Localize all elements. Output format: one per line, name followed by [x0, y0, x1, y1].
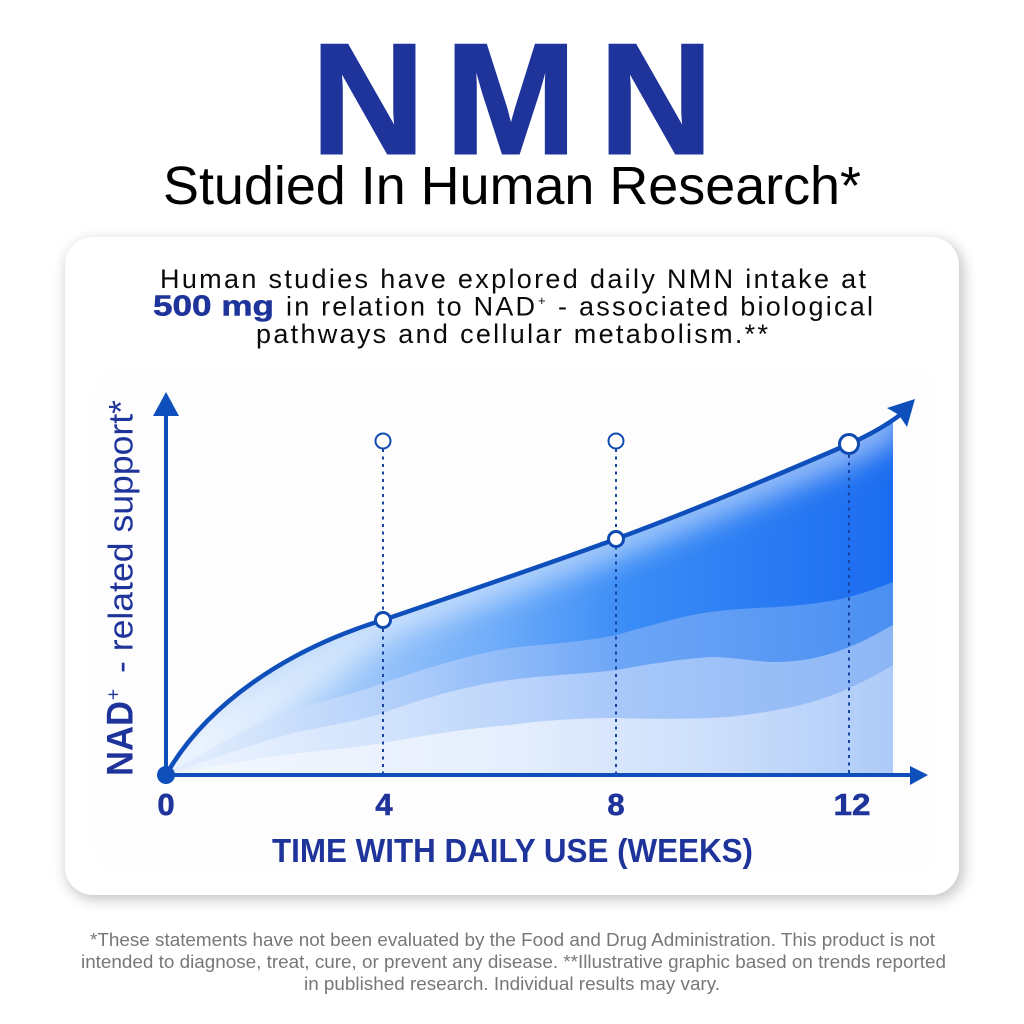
intro text block	[153, 264, 873, 349]
y axis label	[100, 400, 140, 776]
y axis arrow	[153, 392, 179, 775]
trend curve with arrow	[166, 399, 915, 775]
panel: study chart card	[65, 237, 963, 899]
footer disclaimer: in published research. Individual results may vary.	[304, 974, 720, 994]
chart: NAD+ related support over time	[100, 375, 930, 869]
dotted guide lines	[383, 449, 849, 774]
x axis tick labels: 8	[607, 787, 625, 822]
x axis tick labels: 12	[834, 787, 870, 822]
intro text block: +	[538, 293, 546, 308]
intro text block: in relation to NAD	[286, 292, 535, 322]
title: NMN: NMN	[311, 12, 713, 188]
y axis label: +	[104, 689, 124, 700]
x axis tick labels: 0	[157, 787, 175, 822]
origin point	[157, 766, 175, 784]
footer disclaimer: *These statements have not been evaluated by the Food and Drug Administration. This product is not	[90, 930, 935, 950]
x axis arrow	[166, 766, 928, 785]
area layers under the curve	[172, 422, 893, 773]
y axis label: - related support*	[102, 400, 140, 673]
intro text block: pathways and cellular metabolism.**	[256, 319, 768, 349]
y axis label: NAD	[100, 701, 140, 776]
footer disclaimer: intended to diagnose, treat, cure, or prevent any disease. **Illustrative graphic based on trends reported	[81, 952, 946, 972]
x axis title: TIME WITH DAILY USE (WEEKS)	[272, 832, 753, 869]
intro text block: 500 mg	[153, 290, 274, 322]
intro text block: - associated biological	[558, 292, 873, 322]
subtitle: Studied In Human Research*	[163, 156, 861, 216]
footer disclaimer	[81, 930, 946, 994]
x axis tick labels: 4	[375, 787, 393, 822]
data markers	[376, 434, 858, 628]
x axis tick labels	[157, 787, 870, 822]
intro text block: Human studies have explored daily NMN intake at	[160, 264, 866, 294]
